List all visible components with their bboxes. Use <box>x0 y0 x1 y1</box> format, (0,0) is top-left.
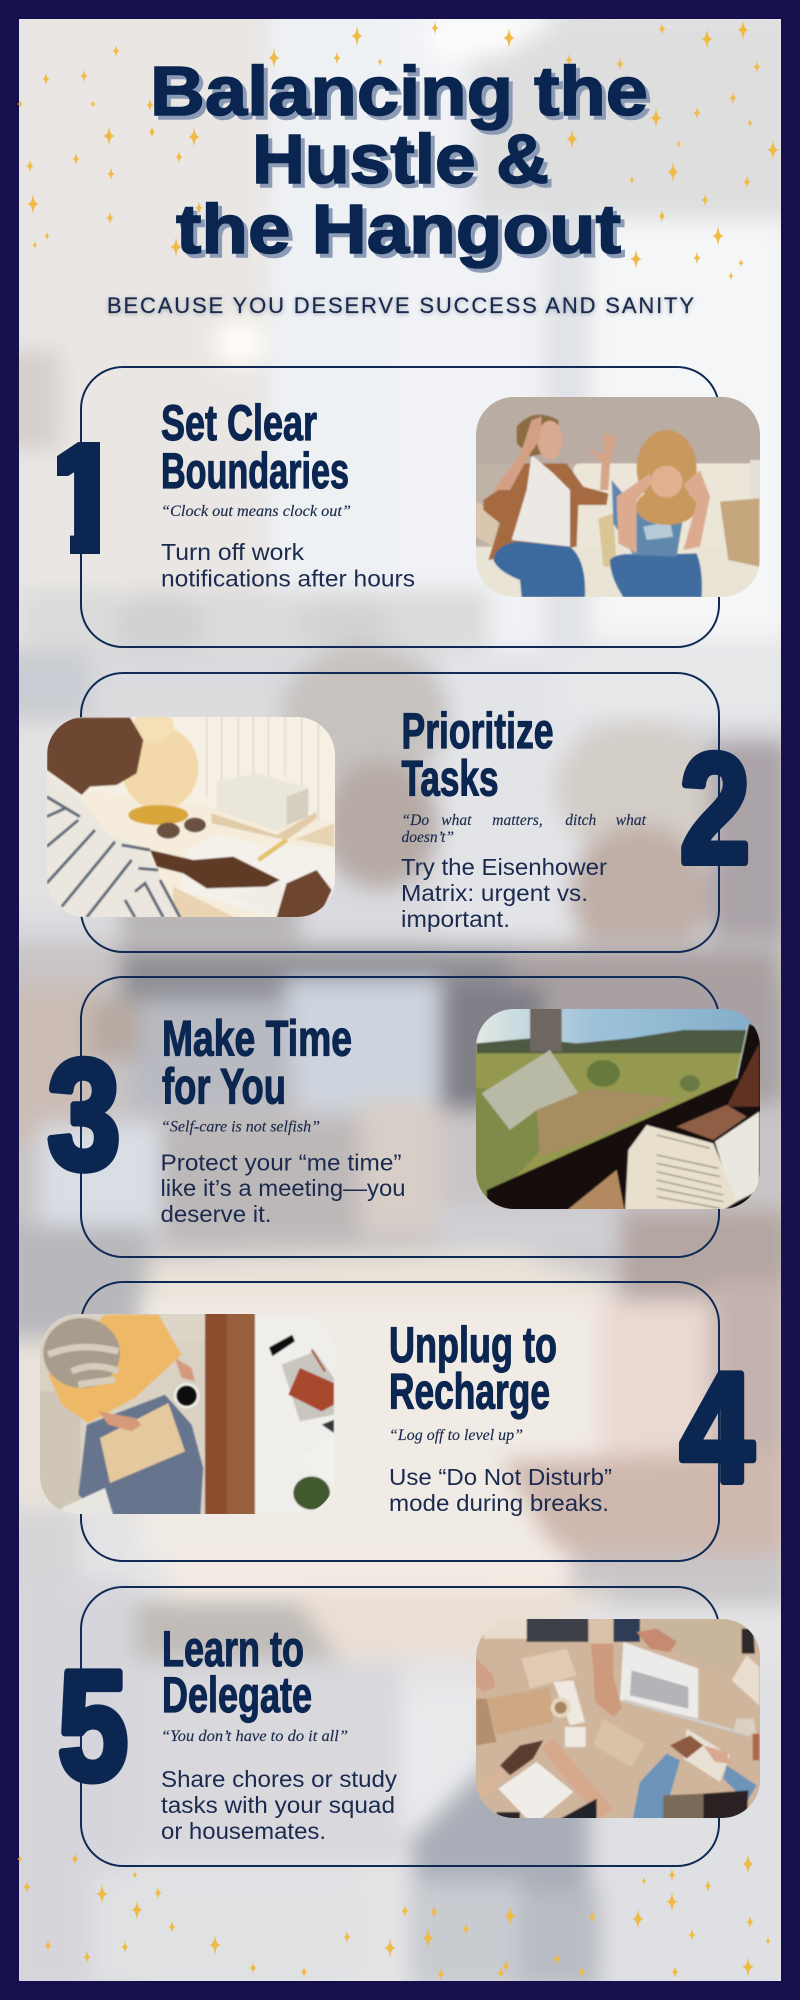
body text: Try the Eisenhower <box>401 854 607 880</box>
heading: make time for you <box>162 1010 352 1114</box>
quote: what <box>441 812 472 829</box>
photo: two women on a sofa <box>476 397 760 597</box>
body text <box>161 539 415 592</box>
upper window area <box>0 0 270 650</box>
body text: Turn off work <box>161 539 305 565</box>
panel: step 3 make time for you <box>48 977 770 1257</box>
floor and figure <box>0 1580 135 2000</box>
body text: Protect your “me time” <box>160 1150 402 1176</box>
title <box>150 52 648 268</box>
quote: “Clock out means clock out” <box>161 503 351 520</box>
heading: make time for you: Make Time <box>162 1010 352 1066</box>
body text: Use “Do Not Disturb” <box>389 1464 612 1490</box>
title: the Hangout <box>176 190 621 268</box>
number 1: 1 <box>42 413 128 590</box>
heading: unplug to recharge: Recharge <box>389 1364 550 1420</box>
stars: top cluster <box>17 20 779 280</box>
panel: step 4 unplug to recharge <box>35 1282 754 1561</box>
title: Balancing the <box>150 52 648 130</box>
heading: set clear boundaries <box>161 395 349 499</box>
quote: “Log off to level up” <box>389 1427 523 1444</box>
quote: ditch <box>565 812 597 829</box>
quote: “Self-care is not selfish” <box>161 1118 320 1136</box>
body text: notifications after hours <box>161 566 415 592</box>
number 4: 4 <box>680 1342 754 1514</box>
body text: Matrix: urgent vs. <box>401 880 588 906</box>
heading: prioritize tasks: Tasks <box>402 750 498 806</box>
quote: “Do <box>402 812 429 829</box>
photo: reading by a train window <box>476 1009 760 1209</box>
body text <box>160 1150 406 1227</box>
heading: unplug to recharge: Unplug to <box>389 1317 557 1373</box>
table with cup <box>0 1340 160 1510</box>
number 2: 2 <box>680 721 750 895</box>
heading: prioritize tasks <box>402 703 554 806</box>
heading: unplug to recharge <box>389 1317 557 1420</box>
panel: step 5 learn to delegate <box>58 1587 770 1866</box>
panel: step 2 prioritize tasks <box>40 673 750 952</box>
number 5: 5 <box>58 1638 128 1812</box>
body text: like it’s a meeting—you <box>160 1175 406 1201</box>
photo: woman reading on a sofa, top view <box>40 1314 335 1514</box>
people <box>19 670 432 930</box>
heading: set clear boundaries: Set Clear <box>161 395 317 451</box>
body text: Share chores or study <box>161 1766 398 1792</box>
body text <box>401 854 607 932</box>
quote: “You don’t have to do it all” <box>161 1728 348 1745</box>
heading: set clear boundaries: Boundaries <box>161 443 349 499</box>
body text <box>389 1464 612 1516</box>
panel: step 1 set clear boundaries <box>42 367 770 647</box>
body text <box>161 1766 398 1844</box>
heading: learn to delegate: Delegate <box>162 1667 312 1723</box>
body text: tasks with your squad <box>161 1792 395 1818</box>
quote: what <box>616 812 647 829</box>
body text: important. <box>401 906 510 932</box>
quote: matters, <box>492 812 543 829</box>
subtitle: BECAUSE YOU DESERVE SUCCESS AND SANITY <box>107 293 694 318</box>
heading: learn to delegate <box>162 1621 312 1723</box>
heading: make time for you: for You <box>162 1058 286 1114</box>
body text: or housemates. <box>161 1818 326 1844</box>
title: Hustle & <box>252 120 549 198</box>
heading: learn to delegate: Learn to <box>162 1621 304 1677</box>
body text: deserve it. <box>160 1201 272 1227</box>
quote: doesn’t” <box>402 829 454 846</box>
number 3: 3 <box>48 1028 120 1202</box>
body text: mode during breaks. <box>389 1490 609 1516</box>
heading: prioritize tasks: Prioritize <box>402 703 554 759</box>
photo: woman writing at a desk <box>47 717 335 917</box>
stars: bottom cluster <box>17 1852 771 1980</box>
photo: team working at a table, top view <box>476 1619 760 1818</box>
